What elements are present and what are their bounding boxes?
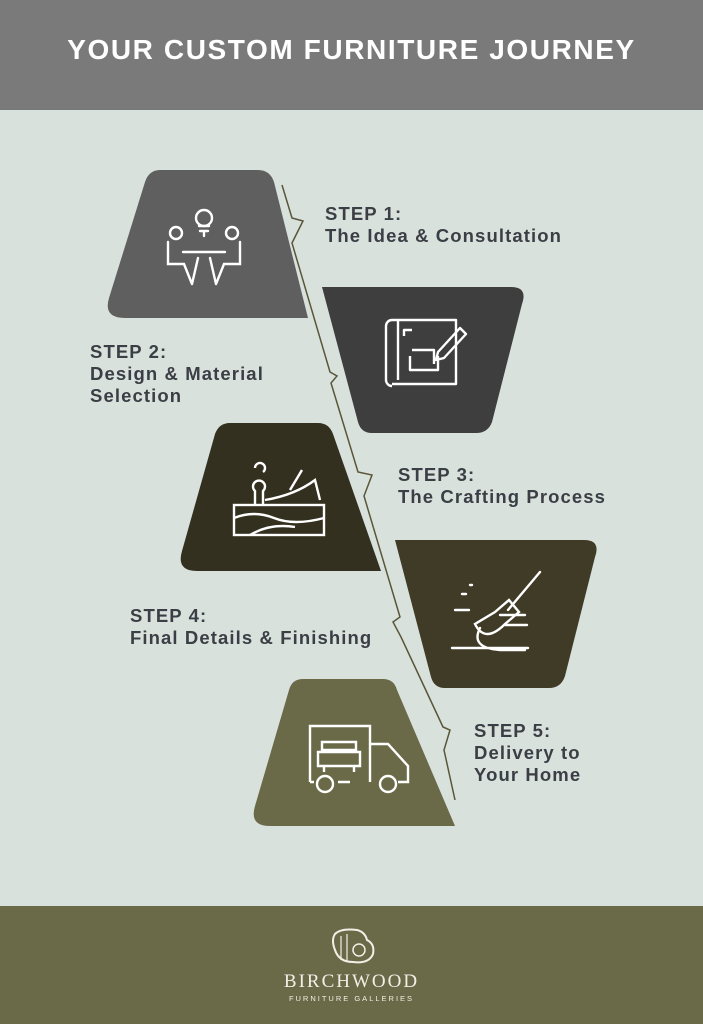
shape 5 <box>254 679 455 826</box>
step 3 text: The Crafting Process <box>398 486 606 507</box>
step 3 text <box>398 464 606 507</box>
footer <box>0 906 703 1024</box>
step 4 text: STEP 4: <box>130 605 207 626</box>
step 1 text <box>325 203 562 246</box>
step 2 text: STEP 2: <box>90 341 167 362</box>
step 2 text: Design & Material <box>90 363 264 384</box>
step 5 text: STEP 5: <box>474 720 551 741</box>
shape 3 <box>181 423 381 571</box>
title: YOUR CUSTOM FURNITURE JOURNEY <box>67 34 636 65</box>
step 5 text: Delivery to <box>474 742 581 763</box>
shape 2 <box>322 287 524 433</box>
logo: BIRCHWOOD <box>284 971 419 992</box>
step 1 text: The Idea & Consultation <box>325 225 562 246</box>
step 1 text: STEP 1: <box>325 203 402 224</box>
icon: consultation <box>168 210 240 284</box>
header <box>0 0 703 110</box>
logo <box>284 928 419 1003</box>
step 2 text <box>90 341 264 406</box>
icon: paint brush <box>452 572 540 650</box>
icon: plane and wood <box>234 463 324 535</box>
step 4 text <box>130 605 372 648</box>
logo: FURNITURE GALLERIES <box>289 994 414 1003</box>
icon: blueprint <box>386 320 466 386</box>
step 4 text: Final Details & Finishing <box>130 627 372 648</box>
step 2 text: Selection <box>90 385 182 406</box>
zigzag connector line <box>282 185 455 800</box>
step 3 text: STEP 3: <box>398 464 475 485</box>
step 5 text: Your Home <box>474 764 581 785</box>
step 5 text <box>474 720 581 785</box>
shape 1 <box>108 170 308 318</box>
icon: delivery truck <box>310 726 408 792</box>
shape 4 <box>395 540 597 688</box>
